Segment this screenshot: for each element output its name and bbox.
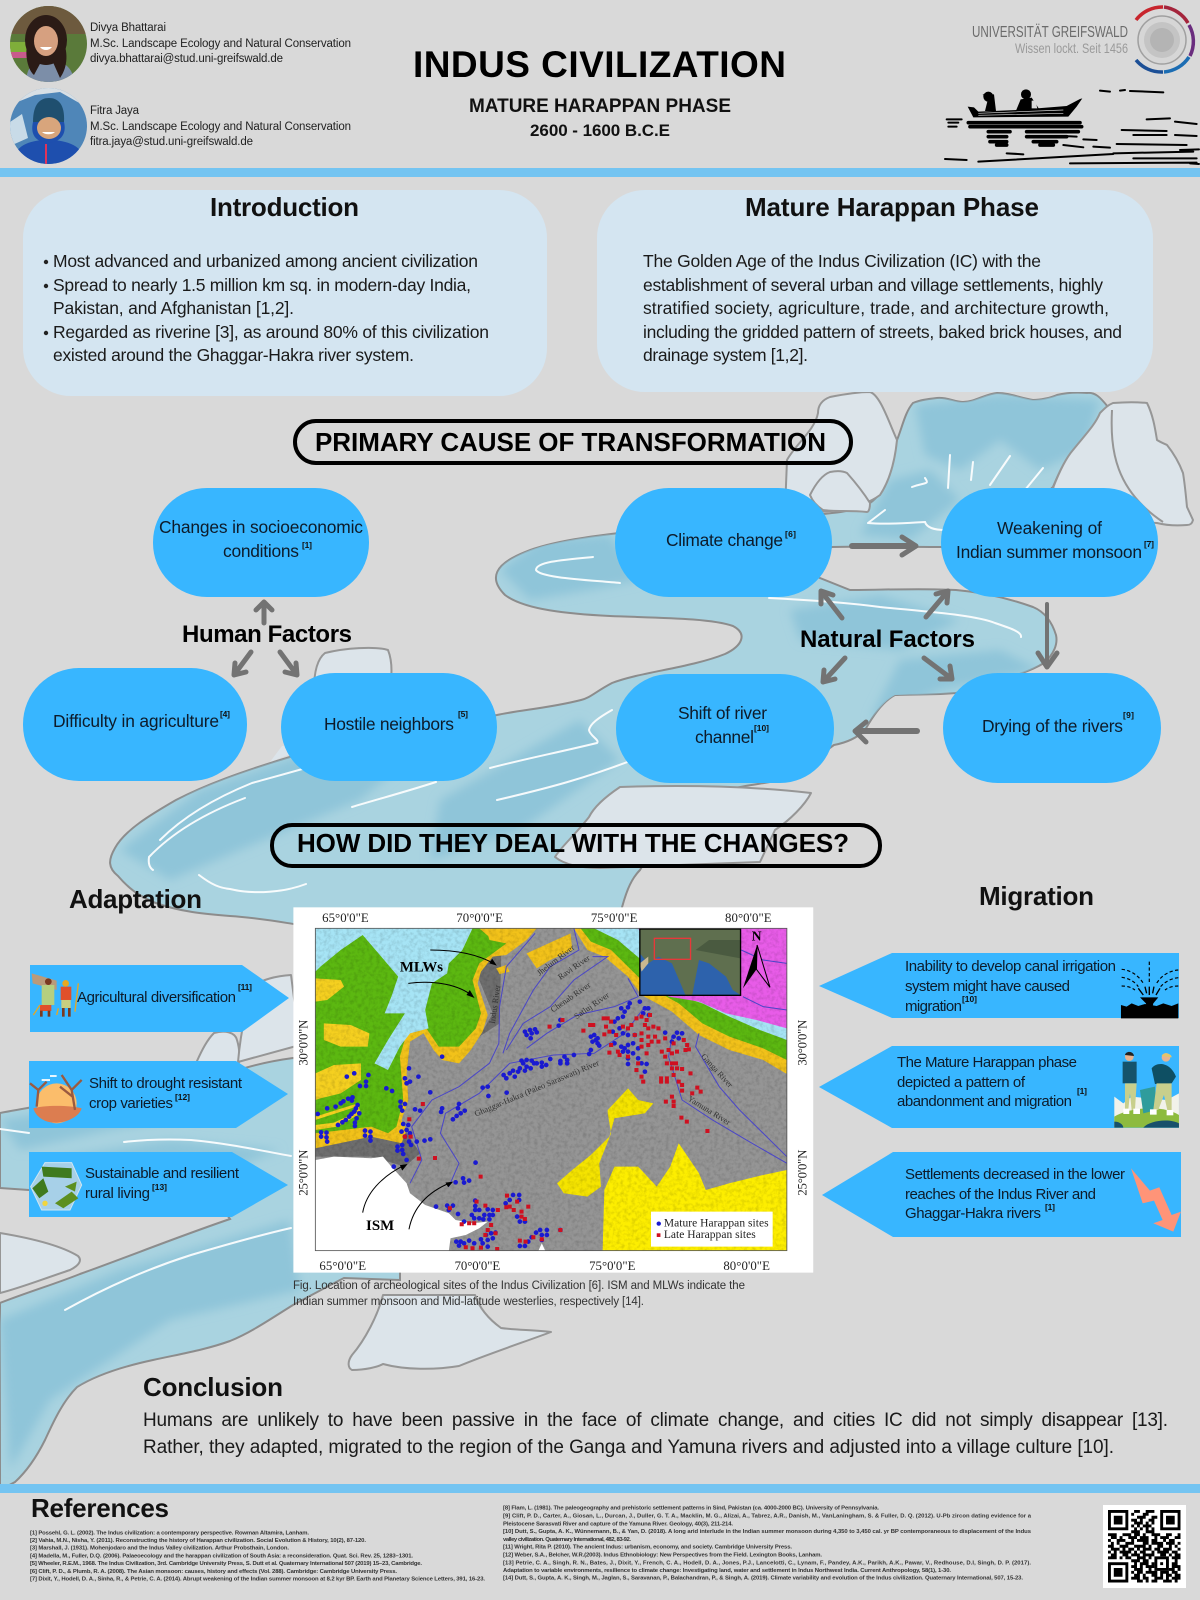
node: difficulty in agriculture [23,668,247,781]
node: drying of rivers: Drying of the rivers [982,716,1123,736]
text: introduction bullets: Spread to nearly 1.5 million km sq. in modern-day India, [53,275,471,295]
section: references [30,1493,1032,1583]
text: conclusion: Humans are unlikely to have been passive in the face of climate change, and cities IC did not simply disappear [13]. [143,1410,1168,1431]
arrow: inability to develop irrigation: migration [905,998,962,1015]
node: shift of river channel: Shift of river [678,703,767,723]
node: hostile neighbors: [5] [458,709,468,719]
arrow: abandonment and migration: abandonment and migration [897,1093,1072,1110]
text: references left: [4] Madella, M., Fuller, D.Q. (2006). Palaeoecology and the harappan civilization of South Asia: a reconsideration. Quat. Sci. Rev. 25, 1283–1301. [30,1553,413,1559]
text: references right: [13] Petrie, C. A., Singh, R. N., Bates, J., Dixit, Y., French, C. A., Hodell, D. A., Jones, P.J., Lancelotti, C., Lynam, F., Pandey, A.K., Parikh, A.K., Pawar, V., Redhouse, D.I, Singh, D. P. (2017). [503,1560,1031,1566]
node: weakening monsoon: Weakening of [997,518,1102,538]
map axis labels: 30°0'0"N [795,1020,809,1066]
inset locator map [640,929,741,995]
map axis labels: 25°0'0"N [795,1150,809,1196]
node: hostile neighbors: Hostile neighbors [324,714,454,734]
river labels: Jhelum River [535,943,576,978]
text: references left: [1] Possehl, G. L. (2002). The Indus civilization: a contemporary perspective. Rowman Altamira, Lanham. [30,1530,309,1536]
arrows: human factor links [234,602,297,675]
portrait: Fitra [10,88,88,164]
icon: travellers [1114,1052,1179,1128]
arrow: drought resistant crops: [12] [175,1092,190,1102]
map axis labels [296,911,809,1273]
node: difficulty in agriculture: Difficulty in agriculture [53,711,219,731]
text: Fitra details: fitra.jaya@stud.uni-greifswald.de [90,136,253,148]
subtitle: 2600 - 1600 B.C.E [530,121,670,140]
text: mature phase description [643,251,1122,365]
text: introduction bullets: existed around the Ghaggar-Hakra river system. [53,345,414,365]
node: socioeconomic conditions: [1] [302,540,312,550]
rocks [0,392,1193,1370]
arrow: abandonment and migration: The Mature Harappan phase [897,1054,1077,1071]
text: references right: [8] Flam, L. (1981). The paleogeography and prehistoric settlement patterns in Sind, Pakistan (ca. 4000-2000 BC). University of Pennsylvania. [503,1506,879,1512]
heading: Primary cause of transformation: PRIMARY CAUSE OF TRANSFORMATION [315,427,826,457]
text: references right: valley civilization. Quaternary International, 482, 83-92. [503,1537,631,1543]
node: weakening monsoon [941,488,1158,597]
river labels: Ganga River [699,1052,735,1090]
author: Fitra Jaya [10,88,351,164]
map axis labels: 30°0'0"N [296,1020,311,1066]
panel: Mature Harappan Phase [597,190,1153,392]
map body: MLWs [400,960,443,976]
map axis labels: 70°0'0"E [456,911,503,925]
text: references left: [2] Vahia, M.N., Nisha, Y. (2011). Reconstructing the history of Harappan civilization. Social Evolution & History, 10(2), 87-120. [30,1538,366,1544]
text: conclusion [143,1410,1168,1458]
arrow: abandonment and migration: [1] [1077,1086,1087,1096]
text: mature phase description: stratified society, agriculture, trade, and architecture growth, [643,298,1109,318]
river labels: Indus River [488,984,502,1024]
icon: dry land [30,1075,82,1123]
heading: Adaptation: Adaptation [69,884,202,914]
text: references left: [3] Marshall, J. (1931). Mohenjodaro and the Indus Valley civilization. Arthur Probsthain, London. [30,1546,289,1552]
text: introduction bullets [44,251,489,365]
map axis labels: 75°0'0"E [589,1259,636,1273]
legend: Late Harappan sites [664,1229,756,1241]
arrow: inability to develop irrigation [819,953,1179,1018]
late Harappan sites [403,1015,709,1249]
icon: recycling rural [31,1163,82,1210]
logo: Universität Greifswald: UNIVERSITÄT GREIFSWALD [972,23,1128,41]
node: weakening monsoon: Indian summer monsoon [956,542,1142,562]
arrow: settlements decreased: Settlements decreased in the lower [905,1166,1125,1183]
legend: Mature Harappan sites [664,1218,769,1230]
map axis labels: 65°0'0"E [319,1259,366,1273]
heading: How did they deal with the changes [272,825,880,866]
subtitle: MATURE HARAPPAN PHASE [469,96,731,117]
node: shift of river channel [616,674,834,783]
wind labels and arrows [363,950,494,1229]
text: introduction bullets: Most advanced and urbanized among ancient civilization [53,251,478,271]
arrow: inability to develop irrigation: Inability to develop canal irrigation [905,958,1116,975]
logo: Universität Greifswald: Wissen lockt. Seit 1456 [1015,40,1128,56]
node: socioeconomic conditions [153,488,369,597]
node: shift of river channel: [10] [754,723,769,733]
mature Harappan sites [318,1002,682,1247]
diagram: natural factors [615,488,1161,783]
heading: How did they deal with the changes: HOW DID THEY DEAL WITH THE CHANGES? [297,828,849,858]
text: mature phase description: The Golden Age of the Indus Civilization (IC) with the [643,251,1041,271]
text: references left [30,1530,485,1583]
map axis labels: 75°0'0"E [591,911,638,925]
river lines [410,928,787,1187]
illustration: boat on water [945,89,1199,164]
river labels: Ghaggar-Hakra (Paleo Saraswati) River [473,1058,601,1118]
QR code [1103,1505,1186,1588]
text: references left: [6] Clift, P. D., & Plumb, R. A. (2008). The Asian monsoon: causes, history and effects (Vol. 288). Cambridge: Cambridge University Press. [30,1569,397,1575]
header bar [0,168,1200,177]
arrow: settlements decreased [822,1152,1181,1237]
text: references right: [9] Clift, P. D., Carter, A., Giosan, L., Durcan, J., Duller, G. T. A., Macklin, M. G., Alizai, A., Tabrez, A.R., Danish, M., VanLaningham, S. & Fuller, D. Q. (2012). U-Pb zircon dating evidence for a [503,1514,1032,1520]
panel: Introduction [23,190,547,396]
arrow: sustainable rural living: Sustainable and resilient [85,1165,240,1182]
text: Divya details: M.Sc. Landscape Ecology and Natural Conservation [90,38,351,50]
heading: References: References [31,1493,169,1523]
arrow: settlements decreased: Ghaggar-Hakra rivers [905,1205,1041,1222]
portrait: Divya [10,6,88,84]
map axis labels: 25°0'0"N [296,1150,311,1196]
map: archaeological sites [293,907,813,1273]
text: introduction bullets: Pakistan, and Afghanistan [1,2]. [53,298,294,318]
map axis labels: 65°0'0"E [322,911,369,925]
section: conclusion [143,1372,1168,1458]
arrow: agricultural diversification [30,965,289,1032]
heading: Mature Harappan Phase: Mature Harappan Phase [745,192,1039,222]
arrow: inability to develop irrigation: [10] [962,994,977,1004]
heading: Conclusion: Conclusion [143,1372,283,1402]
map axis labels: 80°0'0"E [723,1259,770,1273]
text: references right: [14] Dutt, S., Gupta, A. K., Singh, M., Jaglan, S., Saravanan, P., Balachandran, P., & Singh, A. (2019). Climate variability and evolution of the Indus civilization. Quaternary International, 507, 15-23. [503,1576,1023,1582]
author: Divya Bhattarai [10,6,351,84]
arrow: sustainable rural living: rural living [85,1185,150,1202]
arrow: agricultural diversification: Agricultural diversification [77,989,236,1006]
heading: Introduction: Introduction [210,192,359,222]
heading: Natural Factors: Natural Factors [800,626,975,653]
text: mature phase description: establishment of several urban and village settlements, highly [643,275,1103,295]
heading: Primary cause of transformation [295,421,851,463]
text: Fitra details [90,105,351,148]
icon: farmers [32,973,78,1017]
map caption: Indian summer monsoon and Mid-latitude westerlies, respectively [14]. [293,1296,644,1308]
node: drying of rivers: [9] [1123,710,1134,720]
node: weakening monsoon: [7] [1144,539,1154,549]
text: Fitra details: Fitra Jaya [90,105,140,117]
arrows: natural factor links [821,537,1057,742]
node: climate change: Climate change [666,530,783,550]
node: climate change [615,488,832,597]
text: references right: Pleistocene Sarasvati River and capture of the Yamuna River. Geology, 40(3), 211-214. [503,1521,733,1527]
arrow: abandonment and migration: depicted a pattern of [897,1074,1026,1091]
text: Divya details: divya.bhattarai@stud.uni-greifswald.de [90,53,283,65]
map body: ISM [366,1218,394,1234]
map axis labels: 70°0'0"E [455,1259,500,1273]
arrow: abandonment and migration [819,1046,1179,1128]
river labels: Ravi River [556,953,592,982]
text: introduction bullets: Regarded as riverine [3], as around 80% of this civilization [53,322,489,342]
node: drying of rivers [943,673,1161,783]
river illustration [0,393,1108,1490]
arrow: drought resistant crops: crop varieties [89,1095,173,1112]
text: mature phase description: including the gridded pattern of streets, baked brick houses, and [643,322,1122,342]
map body [315,928,787,1251]
heading: Human Factors: Human Factors [182,621,352,648]
node: socioeconomic conditions: Changes in socioeconomic [159,517,363,537]
arrow: settlements decreased: reaches of the Indus River and [905,1186,1096,1203]
north arrow: N [752,929,762,944]
north arrow [743,929,770,988]
diagram: human factors [23,488,497,781]
text: conclusion: Rather, they adapted, migrated to the region of the Ganga and Yamuna rivers and adjusted into a village culture [10]. [143,1437,1114,1458]
logo: Universität Greifswald [972,7,1193,72]
legend [651,1212,773,1247]
river labels [473,943,735,1127]
node: socioeconomic conditions: conditions [223,541,299,561]
text: references left: [5] Wheeler, R.E.M., 1968. The Indus Civilization, 3rd. Cambridge University Press, S. Dutt et al. Quaternary International 507 (2019) 15–23, Cambridge. [30,1561,422,1567]
text: Divya details [90,22,351,65]
text: Fitra details: M.Sc. Landscape Ecology and Natural Conservation [90,121,351,133]
map caption: Fig. Location of archeological sites of the Indus Civilization [6]. ISM and MLWs indicate the [293,1280,745,1292]
text: references right: [12] Weber, S.A., Belcher, W.R.(2003). Indus Ethnobiology: New Perspectives from the Field. Lexington Books, Lanham. [503,1552,822,1558]
title: INDUS CIVILIZATION [413,44,786,85]
arrow: agricultural diversification: [11] [238,982,252,992]
heading: Migration: Migration [979,881,1094,911]
node: shift of river channel: channel [695,727,754,747]
text: references right: Adaptation to variable environments, resilience to climate change: Investigating land, water and settlement in Indus Northwest India. Current Anthropology, 58(1), 1-30. [503,1568,951,1574]
river labels: Yamuna River [686,1094,732,1127]
arrow: settlements decreased: [1] [1045,1202,1055,1212]
subtitle [469,96,731,140]
arrow: sustainable rural living [29,1152,288,1217]
text: references left: [7] Dixit, Y., Hodell, D. A., Sinha, R., & Petrie, C. A. (2014). Abrupt weakening of the Indian summer monsoon at 8.2 kyr BP. Earth and Planetary Science Letters, 391, 16-23. [30,1577,485,1583]
text: references right: [11] Wright, Rita P. (2010). The ancient Indus: urbanism, economy, and society. Cambridge University Press. [503,1545,792,1551]
text: mature phase description: drainage system [1,2]. [643,345,808,365]
text: references right: [10] Dutt, S., Gupta, A. K., Wünnemann, B., & Yan, D. (2018). A long arid interlude in the Indian summer monsoon during 4,350 to 3,450 cal. yr BP contemporaneous to displacement of the Indus [503,1529,1032,1535]
node: difficulty in agriculture: [4] [220,709,230,719]
map axis labels: 80°0'0"E [725,911,772,925]
map caption [293,1280,745,1308]
footer bar [0,1484,1200,1493]
node: climate change: [6] [785,529,796,539]
icon: sprinkler [1121,962,1178,1018]
arrow: drought resistant crops [29,1061,288,1128]
river labels: Satluj River [573,991,611,1021]
arrow: drought resistant crops: Shift to drought resistant [89,1075,243,1092]
text: references right [503,1506,1032,1582]
arrow: sustainable rural living: [13] [152,1182,167,1192]
node: hostile neighbors [281,673,497,781]
text: Divya details: Divya Bhattarai [90,22,166,34]
arrow: inability to develop irrigation: system might have caused [905,978,1070,995]
river labels: Chenab River [549,980,592,1014]
icon: decline arrow [1131,1168,1181,1232]
